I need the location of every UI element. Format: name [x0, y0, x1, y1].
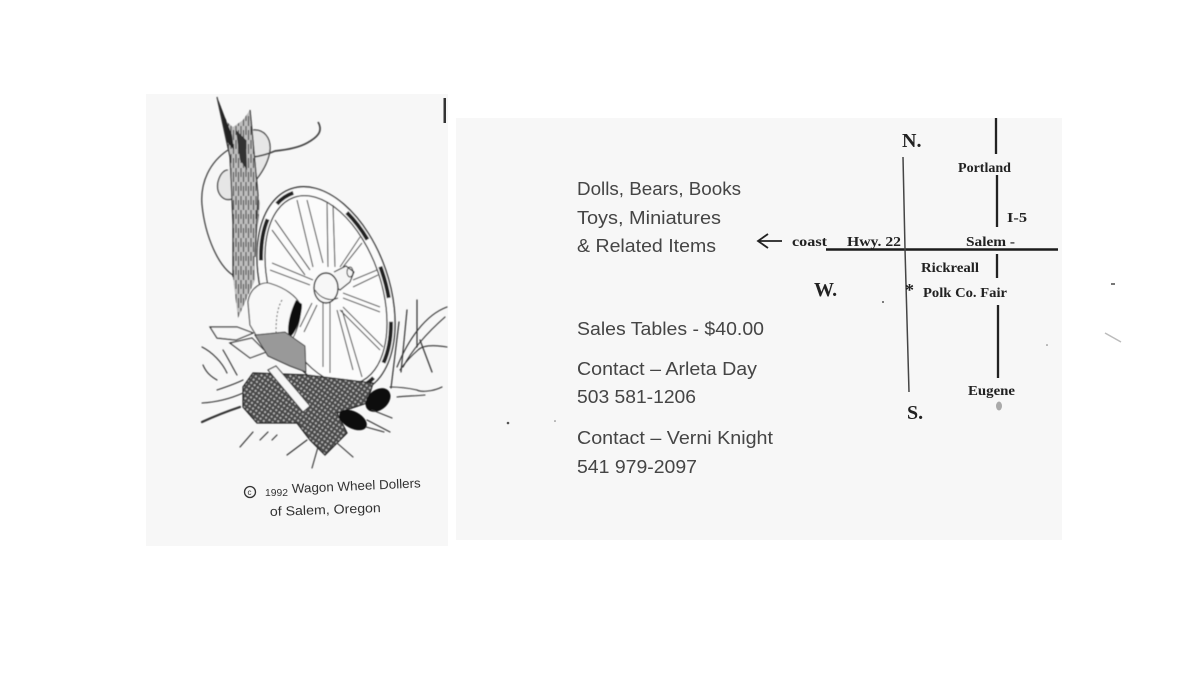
text: contact Verni Knight: Contact – Verni Knight [577, 428, 773, 448]
text: sales tables price: Sales Tables - $40.00 [577, 319, 764, 339]
text: items for sale: Dolls, Bears, Books [577, 179, 741, 199]
arrow: toward coast [758, 234, 782, 248]
labels: place names: coast [792, 234, 828, 249]
illustration: artwork [202, 97, 447, 468]
text: contact Arleta Day: 503 581-1206 [577, 387, 696, 407]
text: copyright line: c [248, 488, 252, 497]
illustration: grass tufts [202, 300, 447, 468]
illustration: doll dress and shoes [243, 366, 395, 455]
text: contact Verni Knight [577, 428, 773, 477]
labels: place names: Salem - [966, 234, 1015, 249]
panel: details and map card [456, 118, 1062, 540]
marks: stray scan specks outside cards [554, 283, 1121, 422]
labels: place names: Hwy. 22 [847, 234, 901, 249]
text: copyright line: of Salem, Oregon [270, 500, 381, 519]
illustration: tree trunk [217, 97, 260, 318]
labels: place names [792, 160, 1027, 398]
text: contact Verni Knight: 541 979-2097 [577, 457, 697, 477]
labels: place names: Portland [958, 160, 1011, 175]
text: contact Arleta Day: Contact – Arleta Day [577, 359, 757, 379]
labels: compass points [814, 130, 923, 424]
labels: compass points: W. [814, 279, 837, 301]
text: items for sale: & Related Items [577, 236, 716, 256]
text: copyright line [244, 475, 422, 519]
labels: place names: Polk Co. Fair [923, 285, 1007, 300]
illustration: wagon wheel [232, 168, 420, 412]
text: copyright line: 1992 [265, 488, 288, 499]
map: directions to Polk County Fair [507, 118, 1058, 424]
illustration: doll bonnet and bow [210, 283, 306, 372]
labels: compass points: N. [902, 130, 921, 152]
mark: scan edge [444, 98, 446, 123]
map: Highway 22 road [826, 248, 1058, 251]
labels: compass points: S. [907, 402, 923, 424]
text: items for sale: Toys, Miniatures [577, 208, 721, 228]
marker: fair location: * [905, 280, 914, 300]
map: I-5 road [996, 118, 998, 378]
text: contact Arleta Day [577, 359, 757, 407]
labels: place names: I-5 [1007, 210, 1027, 225]
text: copyright line: Wagon Wheel Dollers [291, 475, 422, 496]
marks: scan specks [507, 301, 1002, 424]
text: items for sale [577, 179, 741, 256]
labels: place names: Rickreall [921, 260, 979, 275]
illustration: lasso rope [202, 122, 320, 277]
panel: wagon wheel illustration card [146, 94, 448, 546]
labels: place names: Eugene [968, 383, 1015, 398]
map: north-south road [903, 157, 909, 392]
